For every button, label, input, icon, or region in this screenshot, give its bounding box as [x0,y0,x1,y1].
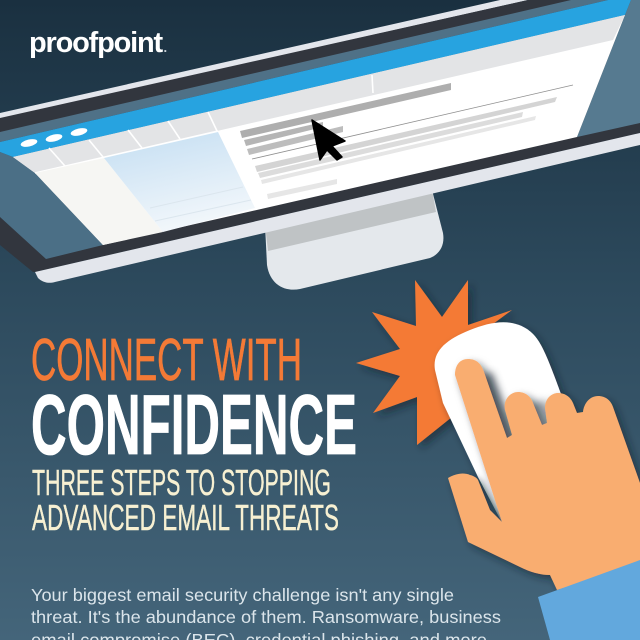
monitor [0,0,640,290]
tabs row [13,15,625,173]
icon: click burst [356,280,512,445]
monitor bottom light edge [35,133,640,283]
title [31,327,357,538]
monitor stand [265,190,443,290]
icon: shirt cuff [538,560,640,640]
browser title bar [0,0,631,157]
monitor dark bezel [0,0,640,272]
cursor arrow [312,120,345,160]
subheading line two: ADVANCED EMAIL THREATS [32,497,339,538]
monitor top slate band [0,0,608,142]
heading: confidence: CONFIDENCE [31,378,357,473]
monitor top light edge [0,0,528,119]
subheading line one: THREE STEPS TO STOPPING [32,462,331,503]
screen side panel right [577,0,640,137]
heading: connect with: CONNECT WITH [31,327,302,393]
email text lines [240,83,573,199]
left folder pane [35,158,163,245]
screen content white [13,15,625,245]
logo: proofpoint. [29,27,166,59]
intro paragraph: threat. It's the abundance of them. Ransomware, business [31,607,501,627]
window buttons [20,127,88,148]
icon: mouse [435,322,565,528]
message list pane [104,132,255,232]
intro paragraph [31,585,501,640]
icon: hand [448,359,640,590]
intro paragraph: Your biggest email security challenge isn't any single [31,585,454,605]
screen side panel left [0,152,103,259]
